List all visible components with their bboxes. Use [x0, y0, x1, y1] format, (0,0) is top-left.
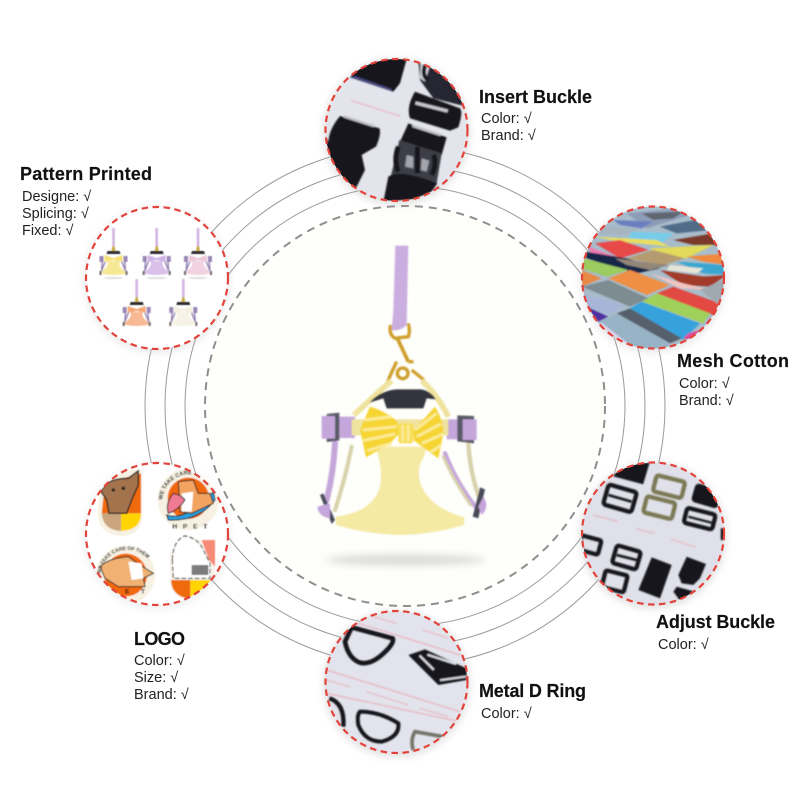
panel: LOGO stickers: WE TAKE CARE OF THEM: [96, 546, 150, 574]
label: Pattern Printed: Splicing: √: [22, 206, 89, 222]
top-right buckle: [418, 63, 462, 107]
label: Mesh Cotton: Color: √: [679, 376, 730, 392]
label: LOGO: LOGO: [134, 629, 185, 649]
mini harness: cream: [169, 279, 197, 326]
concentric rings: [145, 146, 665, 666]
panel: Mesh Cotton photo: [580, 204, 727, 352]
label: Mesh Cotton: Brand: √: [679, 393, 734, 409]
label: LOGO: Size: √: [134, 670, 178, 686]
label: Insert Buckle: Color: √: [481, 111, 532, 127]
label: Mesh Cotton: [677, 351, 789, 409]
label: Insert Buckle: Insert Buckle: [479, 87, 592, 107]
neck collar: [354, 381, 448, 417]
mini harness: pink: [184, 228, 212, 279]
mini harness: purple: [143, 228, 171, 279]
label: Pattern Printed: [20, 164, 152, 239]
right buckle: [400, 123, 447, 155]
label: Adjust Buckle: [656, 612, 775, 653]
sticker: corgi: [158, 469, 219, 530]
label: Adjust Buckle: Color: √: [658, 637, 709, 653]
panel: LOGO stickers: E T: [125, 588, 145, 595]
leash: [392, 246, 408, 330]
snap hook: [387, 323, 424, 383]
panel: LOGO stickers: WE TAKE CARE OF THEM: [158, 470, 195, 500]
mini harness: orange: [123, 279, 151, 326]
purple straps with dark sliders: [337, 417, 355, 438]
side straps: [327, 443, 480, 510]
left buckle: [328, 116, 380, 187]
ground shadow: [325, 555, 485, 565]
panel: Metal D Ring photo: [322, 608, 472, 757]
label: Metal D Ring: [479, 681, 586, 722]
panel: LOGO stickers: [84, 462, 230, 609]
label: LOGO: Brand: √: [134, 687, 189, 703]
label: Adjust Buckle: Adjust Buckle: [656, 612, 775, 632]
mini harness: yellow: [100, 228, 128, 279]
label: LOGO: [134, 629, 189, 703]
central product: harness: [317, 246, 486, 565]
panel: Adjust Buckle photo: [578, 460, 727, 608]
label: Mesh Cotton: Mesh Cotton: [677, 351, 789, 371]
label: Metal D Ring: Color: √: [481, 706, 532, 722]
label: Pattern Printed: Fixed: √: [22, 223, 74, 239]
dark buckle: [369, 389, 436, 408]
sticker: brown dog: [98, 470, 142, 536]
lower side clips: [320, 493, 335, 524]
panel: LOGO stickers: H P E T: [172, 524, 207, 531]
top-left buckle: [350, 57, 407, 92]
pink print: [352, 101, 400, 116]
label: Insert Buckle: [479, 87, 592, 144]
label: Pattern Printed: Designe: √: [22, 189, 91, 205]
vest body: [336, 447, 464, 535]
sticker: shiba: [96, 546, 155, 604]
label: Metal D Ring: Metal D Ring: [479, 681, 586, 701]
panel: Pattern Printed harnesses: [84, 207, 230, 353]
bow tie: [360, 407, 399, 457]
sticker: white dog: [170, 538, 215, 600]
label: LOGO: Color: √: [134, 653, 185, 669]
label: Pattern Printed: Pattern Printed: [20, 164, 152, 184]
panel: Insert Buckle photo: [320, 55, 475, 207]
label: Insert Buckle: Brand: √: [481, 128, 536, 144]
